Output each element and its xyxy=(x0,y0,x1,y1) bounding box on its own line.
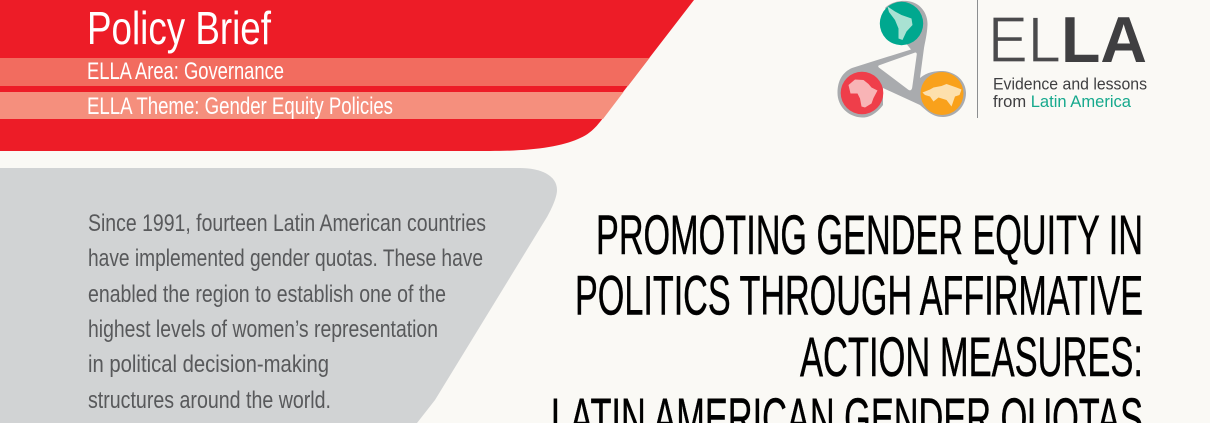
icon: eurasia globe xyxy=(920,72,964,115)
label: ELLA Theme: ELLA Theme: Gender Equity Policies xyxy=(87,93,393,120)
logo: ELLA wordmark xyxy=(988,3,1147,76)
band: area xyxy=(0,58,650,86)
panel: red header banner xyxy=(0,0,694,151)
logo: tagline xyxy=(993,76,1147,111)
summary text: highest levels of women’s representation xyxy=(88,316,438,343)
icon: americas globe xyxy=(880,2,923,45)
summary text: enabled the region to establish one of the xyxy=(88,281,446,308)
summary text: Since 1991, fourteen Latin American countries xyxy=(88,210,486,237)
icon: africa globe xyxy=(841,72,883,114)
logo: ELLA wordmark: LA xyxy=(1061,3,1147,76)
heading: Policy Brief: Policy Brief xyxy=(87,2,271,54)
logo: ELLA wordmark: EL xyxy=(988,3,1061,76)
label: ELLA Area: ELLA Area: Governance xyxy=(87,58,284,85)
panel: grey summary xyxy=(0,168,557,423)
summary text: have implemented gender quotas. These have xyxy=(88,245,483,272)
logo: ELLA emblem xyxy=(838,1,966,118)
summary text: in political decision-making xyxy=(88,351,329,378)
emblem frame xyxy=(838,1,966,118)
title xyxy=(551,204,1143,423)
divider xyxy=(977,0,978,118)
band: theme xyxy=(0,92,624,119)
logo: tagline: Evidence and lessons xyxy=(993,76,1147,94)
logo: tagline: from Latin America xyxy=(993,93,1132,111)
summary text xyxy=(88,210,486,414)
summary text: structures around the world. xyxy=(88,387,331,414)
